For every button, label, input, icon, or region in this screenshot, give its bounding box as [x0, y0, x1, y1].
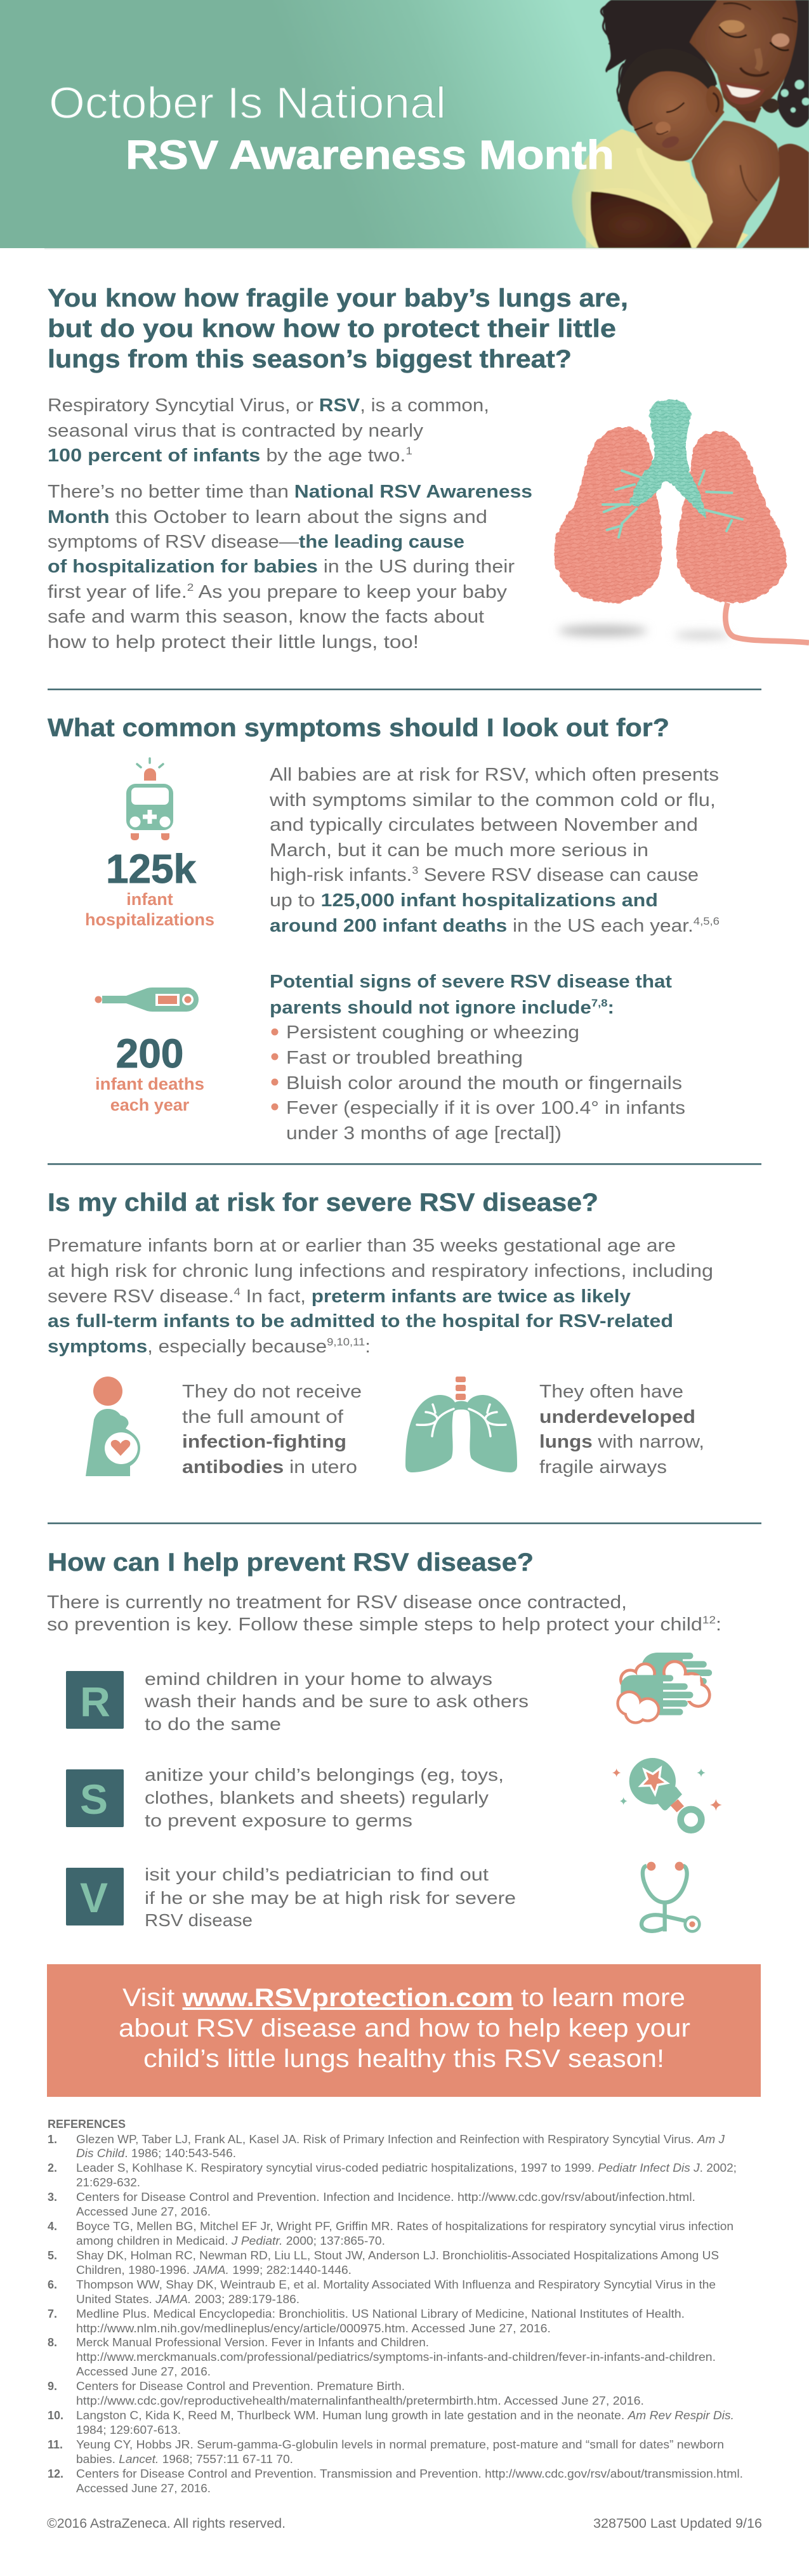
references: 9. — [48, 2380, 57, 2393]
call to action panel: child’s little lungs healthy this RSV season! — [143, 2045, 664, 2073]
step V: visit — [66, 1865, 516, 1930]
intro paragraph 2: As you prepare to keep your baby — [194, 582, 508, 602]
step S: sanitize: S — [80, 1776, 108, 1823]
references: Thompson WW, Shay DK, Weintraub E, et al. Mortality Associated With Influenza and Respiratory Syncytial Virus in the — [76, 2278, 716, 2291]
text: underdeveloped lungs — [539, 1382, 704, 1477]
references: 1. — [48, 2133, 57, 2146]
references: Merck Manual Professional Version. Fever in Infants and Children. — [76, 2336, 429, 2349]
title: October Is National — [49, 78, 446, 128]
icon: stethoscope — [641, 1862, 699, 1931]
hero banner — [0, 0, 809, 249]
stat: 125k hospitalizations: 125k — [106, 846, 196, 892]
references: Dis Child. 1986; 140:543-546. — [76, 2147, 236, 2160]
step S: sanitize — [66, 1765, 504, 1830]
text: underdeveloped lungs: underdeveloped — [539, 1407, 695, 1427]
step V: visit: V — [80, 1874, 108, 1921]
references: 3. — [48, 2191, 57, 2203]
intro paragraph 2: first year of life. — [48, 582, 173, 602]
stat: 125k hospitalizations: hospitalizations — [85, 910, 214, 929]
photo: mother holding sleeping baby — [572, 0, 809, 248]
footer: ©2016 AstraZeneca. All rights reserved. — [47, 2516, 286, 2531]
prevention intro: so prevention is key. Follow these simple steps to help protect your child — [47, 1615, 635, 1635]
step R: remind: wash their hands and be sure to ask others — [144, 1691, 529, 1711]
references: Accessed June 27, 2016. — [76, 2365, 211, 2378]
risk paragraph: symptoms , especially because — [48, 1337, 313, 1357]
references: Centers for Disease Control and Prevention. Infection and Incidence. http://www.cdc.gov/rsv/about/infection.html. — [76, 2191, 695, 2203]
image: crochet lungs — [555, 400, 809, 643]
references: 6. — [48, 2278, 57, 2291]
stat: 200 deaths: each year — [110, 1095, 190, 1114]
references: 10. — [48, 2409, 63, 2422]
symptoms paragraph: 4,5,6 — [694, 915, 720, 927]
intro heading: lungs from this season’s biggest threat? — [48, 345, 572, 373]
symptoms paragraph: and typically circulates between November and — [270, 815, 698, 835]
intro paragraph 2: Month this October to learn about the signs and — [48, 507, 487, 527]
heading: risk: Is my child at risk for severe RSV disease? — [48, 1189, 598, 1217]
text: antibodies: They do not receive — [182, 1382, 362, 1402]
intro paragraph 1: 100 percent of infants by the age two. — [48, 446, 390, 466]
intro paragraph 2: how to help protect their little lungs, too! — [48, 632, 419, 652]
footer: 3287500 Last Updated 9/16 — [593, 2516, 762, 2531]
step V: visit: isit your child’s pediatrician to find out — [145, 1865, 489, 1884]
references: among children in Medicaid. J Pediatr. 2000; 137:865-70. — [76, 2235, 385, 2247]
symptoms paragraph: March, but it can be much more serious in — [270, 840, 648, 861]
stat: 200 deaths — [95, 1031, 204, 1114]
intro paragraph 2: There’s no better time than National RSV Awareness — [48, 482, 532, 502]
call to action panel: about RSV disease and how to help keep your — [119, 2014, 690, 2042]
references: Centers for Disease Control and Prevention. Premature Birth. — [76, 2380, 405, 2393]
symptoms paragraph: All babies are at risk for RSV, which often presents — [270, 765, 719, 785]
references: REFERENCES — [48, 2118, 126, 2130]
references: 11. — [48, 2438, 63, 2451]
title — [49, 78, 614, 178]
symptoms paragraph: high-risk infants. — [270, 865, 404, 885]
intro paragraph 2: symptoms of RSV disease— the leading cause — [48, 532, 464, 552]
text: antibodies: the full amount of — [182, 1407, 344, 1427]
references: 12. — [48, 2467, 63, 2480]
heading: prevention: How can I help prevent RSV disease? — [48, 1549, 534, 1576]
references: http://www.nlm.nih.gov/medlineplus/ency/article/000975.htm. Accessed June 27, 2016. — [76, 2322, 551, 2335]
references: babies. Lancet. 1968; 7557:11 67-11 70. — [76, 2453, 293, 2466]
risk paragraph: Premature infants born at or earlier than 35 weeks gestational age are — [48, 1236, 676, 1256]
heading: symptoms: What common symptoms should I look out for? — [48, 714, 669, 742]
intro heading: but do you know how to protect their little — [48, 315, 616, 343]
intro paragraph 2: 2 — [187, 581, 194, 593]
stat: 200 deaths: 200 — [116, 1031, 183, 1076]
call to action panel — [47, 1964, 761, 2097]
references: http://www.merckmanuals.com/professional/pediatrics/symptoms-in-infants-and-children/fever-in-infants-and-children. — [76, 2351, 716, 2363]
severe signs bullet list: Fever (especially if it is over 100.4° in infants — [286, 1098, 685, 1118]
references: Glezen WP, Taber LJ, Frank AL, Kasel JA. Risk of Primary Infection and Reinfection with Respiratory Syncytial Virus. Am J — [76, 2133, 725, 2146]
step R: remind: R — [80, 1678, 110, 1725]
prevention intro — [47, 1592, 721, 1635]
stat: 125k hospitalizations: infant — [126, 890, 173, 909]
references: Accessed June 27, 2016. — [76, 2205, 211, 2218]
icon: lungs — [405, 1377, 517, 1472]
risk paragraph: as full-term infants to be admitted to the hospital for RSV-related — [48, 1311, 673, 1331]
intro paragraph 1 — [48, 395, 489, 466]
text: antibodies — [182, 1382, 362, 1477]
symptoms paragraph — [269, 765, 720, 936]
references: 8. — [48, 2336, 57, 2349]
risk paragraph: 9,10,11 — [327, 1336, 365, 1348]
references: Medline Plus. Medical Encyclopedia: Bronchiolitis. US National Library of Medicine, National Institutes of Health. — [76, 2308, 685, 2320]
references: Shay DK, Holman RC, Newman RD, Liu LL, Stout JW, Anderson LJ. Bronchiolitis-Associated Hospitalizations Among US — [76, 2249, 719, 2262]
severe signs bullet list — [272, 1022, 685, 1144]
references: 1984; 129:607-613. — [76, 2424, 181, 2436]
step S: sanitize: anitize your child’s belongings (eg, toys, — [145, 1765, 504, 1785]
prevention intro: There is currently no treatment for RSV disease once contracted, — [47, 1592, 627, 1613]
references — [48, 2118, 743, 2495]
references: 4. — [48, 2220, 57, 2233]
references: 5. — [48, 2249, 57, 2262]
icon: soapy hands — [619, 1653, 712, 1721]
stat: 125k hospitalizations — [85, 846, 214, 929]
intro paragraph 2: of hospitalization for babies in the US during their — [48, 557, 515, 577]
prevention intro: : — [716, 1615, 721, 1635]
icon: thermometer — [95, 987, 199, 1012]
icon: pregnant mother — [86, 1377, 140, 1476]
references: Boyce TG, Mellen BG, Mitchel EF Jr, Wright PF, Griffin MR. Rates of hospitalizations for respiratory syncytial virus infection — [76, 2220, 733, 2233]
prevention intro: 12 — [702, 1614, 716, 1626]
risk paragraph: In fact, — [240, 1286, 312, 1307]
references: 7. — [48, 2308, 57, 2320]
stat: 200 deaths: infant deaths — [95, 1074, 204, 1093]
intro paragraph 2 — [48, 482, 532, 652]
severe signs heading: parents should not ignore include — [270, 998, 566, 1018]
risk paragraph: : — [365, 1337, 371, 1357]
severe signs heading: : — [608, 998, 614, 1018]
text: antibodies: infection-fighting — [182, 1432, 346, 1452]
risk paragraph — [48, 1236, 713, 1357]
step V: visit: RSV disease — [145, 1910, 253, 1930]
references: http://www.cdc.gov/reproductivehealth/maternalinfanthealth/pretermbirth.htm. Accessed June 27, 2016. — [76, 2394, 644, 2407]
title: RSV Awareness Month — [126, 132, 614, 178]
references: Yeung CY, Hobbs JR. Serum-gamma-G-globulin levels in normal premature, post-mature and “small for dates” newborn — [76, 2438, 724, 2451]
text: antibodies: antibodies in utero — [182, 1457, 357, 1477]
symptoms paragraph: around 200 infant deaths in the US each year. — [270, 916, 678, 936]
intro paragraph 1: Respiratory Syncytial Virus, or RSV, is a common, — [48, 395, 489, 416]
step S: sanitize: to prevent exposure to germs — [145, 1811, 412, 1830]
severe signs bullet list: Fast or troubled breathing — [286, 1048, 523, 1068]
risk paragraph: severe RSV disease. — [48, 1286, 220, 1307]
symptoms paragraph: 3 — [412, 864, 418, 876]
symptoms paragraph: with symptoms similar to the common cold or flu, — [269, 790, 716, 810]
text: underdeveloped lungs: They often have — [539, 1382, 683, 1402]
symptoms paragraph: Severe RSV disease can cause — [418, 865, 699, 885]
severe signs bullet list: Persistent coughing or wheezing — [286, 1022, 579, 1043]
references: 2. — [48, 2162, 57, 2174]
severe signs heading: 7,8 — [591, 997, 608, 1009]
call to action panel: Visit www.RSVprotection.com to learn more — [122, 1984, 685, 2012]
intro heading: You know how fragile your baby’s lungs are, — [48, 284, 628, 312]
footer — [47, 2516, 762, 2531]
risk paragraph: preterm infants are twice as likely — [312, 1286, 631, 1307]
intro paragraph 1: seasonal virus that is contracted by nearly — [48, 421, 424, 441]
references: United States. JAMA. 2003; 289:179-186. — [76, 2293, 299, 2306]
risk paragraph: at high risk for chronic lung infections and respiratory infections, including — [48, 1261, 713, 1281]
severe signs heading: Potential signs of severe RSV disease that — [270, 972, 672, 992]
intro paragraph 2: safe and warm this season, know the facts about — [48, 607, 484, 627]
references: Leader S, Kohlhase K. Respiratory syncytial virus-coded pediatric hospitalizations, 1997 to 1999. Pediatr Infect Dis J . 2002; — [76, 2162, 737, 2174]
icon: rattle — [612, 1758, 722, 1830]
step R: remind — [66, 1669, 529, 1734]
references: Langston C, Kida K, Reed M, Thurlbeck WM. Human lung growth in late gestation and in the neonate. Am Rev Respir Dis. — [76, 2409, 734, 2422]
references: Children, 1980-1996. JAMA. 1999; 282:1440-1446. — [76, 2264, 352, 2276]
severe signs bullet list: under 3 months of age [rectal]) — [286, 1123, 562, 1144]
step R: remind: emind children in your home to always — [145, 1669, 492, 1689]
severe signs heading — [270, 972, 672, 1018]
symptoms paragraph: up to 125,000 infant hospitalizations and — [270, 890, 658, 911]
intro heading — [48, 284, 628, 373]
text: underdeveloped lungs: fragile airways — [539, 1457, 667, 1477]
intro paragraph 1: 1 — [405, 445, 412, 457]
step R: remind: to do the same — [145, 1714, 281, 1734]
severe signs bullet list: Bluish color around the mouth or fingernails — [286, 1073, 682, 1093]
references: Accessed June 27, 2016. — [76, 2482, 211, 2495]
icon: ambulance — [126, 758, 173, 840]
step V: visit: if he or she may be at high risk for severe — [145, 1888, 516, 1908]
references: 21:629-632. — [76, 2176, 140, 2189]
text: underdeveloped lungs: lungs with narrow, — [539, 1432, 704, 1452]
step S: sanitize: clothes, blankets and sheets) regularly — [145, 1788, 489, 1807]
risk paragraph: 4 — [234, 1286, 240, 1298]
references: Centers for Disease Control and Prevention. Transmission and Prevention. http://www.cdc.gov/rsv/about/transmission.html. — [76, 2467, 743, 2480]
